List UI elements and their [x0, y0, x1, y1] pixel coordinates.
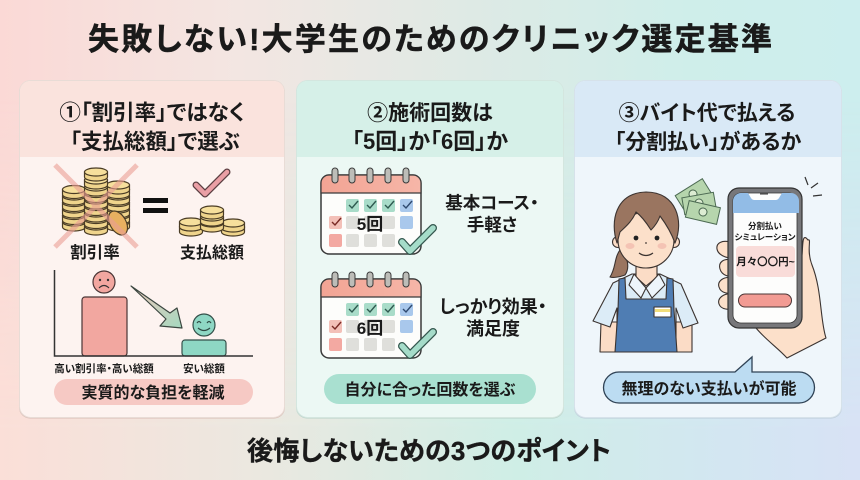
icon: small coin stacks [180, 206, 244, 236]
icon: sad face [93, 271, 115, 293]
name badge [654, 307, 671, 317]
shirt [593, 274, 698, 352]
button [738, 294, 792, 307]
illustration: student in apron [593, 192, 698, 352]
neck [636, 258, 657, 286]
text: solid effect [439, 297, 547, 339]
ponytail [610, 250, 628, 277]
panel: 支払総額で選ぶ [19, 80, 285, 418]
panel heading: ②施術回数は [367, 101, 493, 125]
panel heading [575, 81, 841, 157]
panel: 施術回数 [296, 80, 564, 418]
icon: calendar 6 times: 6回 [357, 319, 383, 338]
arrow: high to low [131, 286, 182, 328]
icon: happy face [193, 314, 215, 336]
ears [612, 236, 624, 248]
label: 支払総額: 支払総額 [180, 243, 244, 262]
text: solid effect: しっかり効果・ [439, 297, 547, 317]
callout pill: 自分に合った回数を選ぶ [345, 380, 515, 399]
screen text [734, 221, 796, 242]
text: solid effect: 満足度 [466, 319, 520, 339]
callout bubble: 無理のない支払いが可能 [622, 379, 796, 398]
bar: high total [82, 297, 127, 356]
panel heading: 「分割払い」があるか [615, 130, 801, 154]
label: 割引率: 割引率 [70, 243, 120, 262]
callout bubble [604, 357, 814, 403]
panel heading [297, 81, 563, 157]
collar [629, 274, 665, 298]
footer caption: 後悔しないための3つのポイント [247, 436, 611, 466]
text: basic course: 手軽さ [467, 215, 517, 235]
monthly amount box: 月々〇〇円~ [736, 256, 795, 268]
bar: low total [182, 340, 226, 356]
icon: check mark [196, 172, 227, 194]
panel: 分割払い [574, 80, 842, 418]
panel heading: 「支払総額」で選ぶ [70, 130, 240, 154]
callout pill [54, 379, 253, 405]
hair [614, 192, 679, 243]
icon: calendar 5 times: 5回 [357, 215, 383, 234]
callout pill: 実質的な負担を軽減 [81, 383, 225, 402]
callout pill [324, 374, 536, 404]
icon: calendar 5 times [321, 168, 433, 254]
icon: sparkle lines [805, 177, 822, 196]
icon: equals sign [143, 198, 168, 213]
arms [600, 322, 692, 352]
panel heading: ③バイト代で払える [619, 102, 795, 125]
screen text: 分割払い [748, 221, 782, 231]
label: high: 高い割引率・高い総額 [54, 362, 154, 375]
icon: crossed-out coin stacks [55, 165, 137, 247]
screen text: シミュレーション [734, 232, 796, 242]
text: basic course: 基本コース・ [445, 193, 539, 213]
chart: total cost comparison [54, 270, 253, 375]
label: low: 安い総額 [183, 362, 225, 375]
icon: banknotes [675, 179, 720, 224]
icon: calendar 6 times [321, 272, 433, 358]
title: 失敗しない!大学生のためのクリニック選定基準 [88, 22, 772, 57]
phone [728, 188, 802, 328]
text: basic course [445, 193, 539, 235]
face [618, 212, 674, 268]
panel heading: 「5回」か「6回」か [352, 129, 508, 154]
illustration: hand holding phone [717, 188, 826, 358]
panel heading [20, 81, 284, 157]
apron [615, 278, 677, 352]
panel heading: ①「割引率」ではなく [59, 101, 245, 125]
